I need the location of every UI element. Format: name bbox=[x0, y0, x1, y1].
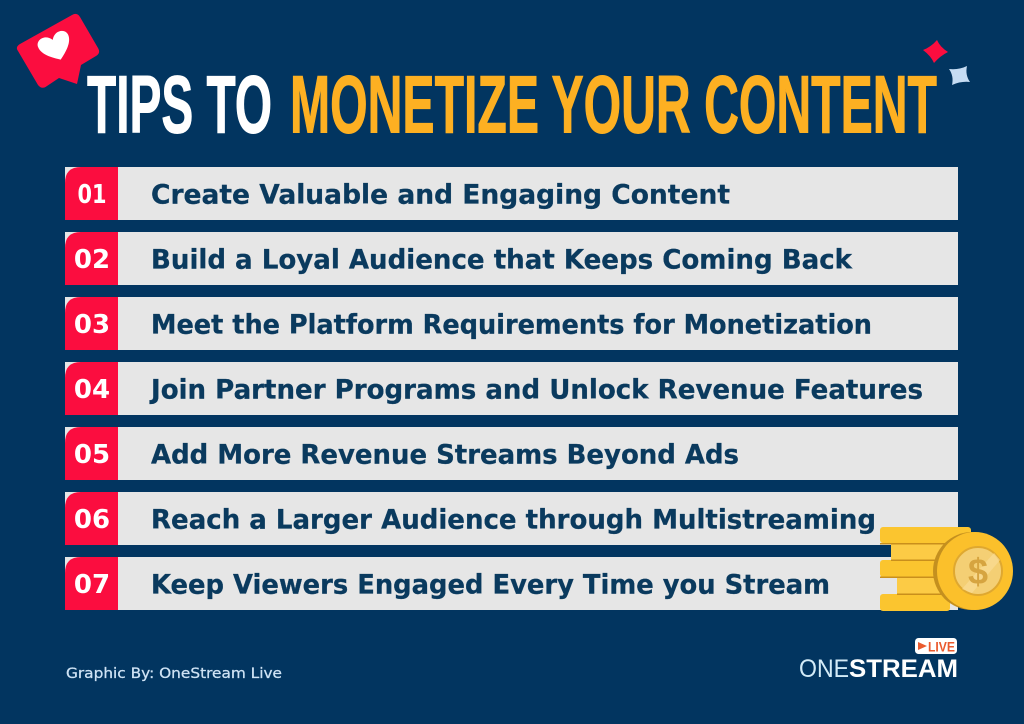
title bbox=[87, 60, 937, 150]
tip 01 bbox=[65, 167, 958, 220]
tip 06 bbox=[65, 492, 958, 545]
tip 04: Join Partner Programs and Unlock Revenue Features bbox=[149, 374, 923, 406]
tip 04 bbox=[65, 362, 958, 415]
tip 07: 07 bbox=[74, 570, 110, 600]
tip 01: 01 bbox=[78, 180, 106, 210]
tip 06: 06 bbox=[74, 505, 110, 535]
OneStream Live logo: LIVE bbox=[928, 638, 955, 654]
icon: light blue sparkle bbox=[949, 66, 970, 85]
OneStream Live logo bbox=[799, 638, 958, 683]
OneStream Live logo: STREAM bbox=[849, 655, 958, 683]
tip 07: Keep Viewers Engaged Every Time you Stream bbox=[151, 570, 830, 600]
tip 02 bbox=[65, 232, 958, 285]
tip 03: Meet the Platform Requirements for Monetization bbox=[151, 310, 872, 340]
tip 05 bbox=[65, 427, 958, 480]
icon: gold coin stack bbox=[880, 527, 1013, 611]
credit text: Graphic By: OneStream Live bbox=[66, 666, 282, 682]
tip 07 bbox=[65, 557, 958, 610]
icon: red sparkle bbox=[923, 40, 948, 63]
tip 05: Add More Revenue Streams Beyond Ads bbox=[151, 440, 739, 470]
tip 03: 03 bbox=[74, 310, 110, 340]
tip 01: Create Valuable and Engaging Content bbox=[151, 180, 730, 210]
tip 04: 04 bbox=[74, 375, 110, 405]
tip 06: Reach a Larger Audience through Multistreaming bbox=[151, 504, 876, 536]
tip 02: 02 bbox=[74, 245, 110, 275]
tip 05: 05 bbox=[74, 440, 110, 470]
OneStream Live logo: ONE bbox=[799, 655, 849, 683]
icon: heart speech bubble bbox=[17, 14, 99, 88]
tip 03 bbox=[65, 297, 958, 350]
title: TIPS TO bbox=[87, 60, 272, 150]
tip 02: Build a Loyal Audience that Keeps Coming Back bbox=[151, 244, 853, 276]
icon: gold coin stack: $ bbox=[968, 551, 988, 592]
